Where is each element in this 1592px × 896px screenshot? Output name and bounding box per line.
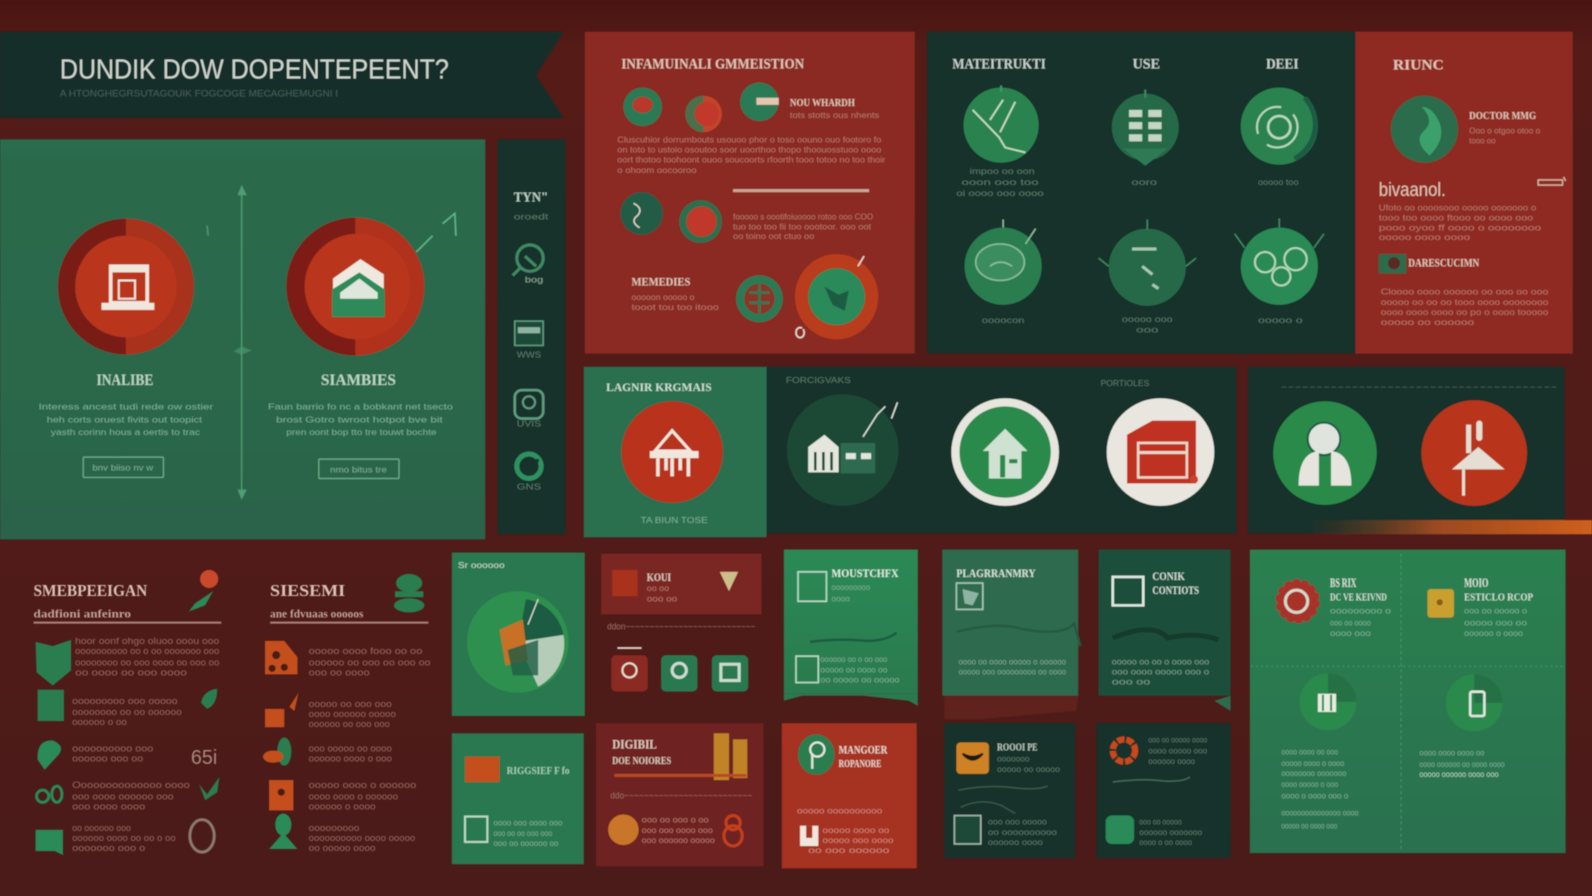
panel: pie chart: Sr oooooo (458, 560, 505, 570)
text row 2: tuo too too fii too oootoor. ooo oot (733, 222, 872, 232)
subheading: bivaanol. (1379, 180, 1446, 201)
icon: shield (36, 640, 71, 686)
text: ooooo ooo oooo (822, 835, 894, 845)
text: right description (268, 401, 453, 437)
text: ooo oo ooo o oo (642, 815, 709, 825)
icon: bookmark (38, 690, 64, 721)
text: remedies (632, 277, 719, 312)
text block: Ooo o otgoo otoo o (1469, 125, 1540, 135)
text (808, 825, 894, 855)
heading: right option: SIAMBIES (321, 371, 396, 389)
text left: ooooo oooo o oooo (1281, 758, 1344, 768)
text row: ooo oooo oooooo ooo (72, 791, 174, 801)
text row (72, 744, 153, 764)
subheading: DARESCUCIMN (1408, 257, 1479, 269)
text: oooo ooooo ooo (1148, 746, 1207, 756)
text row: oooooo oo ooo oo ooo oo (309, 657, 430, 667)
text row: oo ooooo oooo (309, 843, 376, 853)
icon: remedy large (795, 254, 878, 339)
icon: orange card (269, 780, 293, 810)
panel: dark icon strip right (1248, 367, 1565, 533)
text: ooooo oo oo o oooo ooo (1112, 656, 1209, 666)
icon: sidebar camera (515, 390, 543, 429)
text left: oooo o oooo ooo o (1281, 790, 1349, 800)
captions row 2: ooo (1136, 324, 1159, 334)
text: ooooo ooo oo (1464, 618, 1527, 628)
icon: leaves (263, 737, 291, 766)
text: ooo ooo ooooo (988, 817, 1047, 827)
text: ooooo oooooooooo (797, 806, 883, 816)
paragraph: Ufoto oo oooosooo ooooo ooooooo o (1379, 202, 1536, 212)
text left: oooo ooooo o ooo (1281, 779, 1338, 789)
icon: swirl (38, 740, 61, 770)
icon: orange tile (465, 757, 500, 782)
text: oooo ooo oooo ooo (493, 818, 563, 828)
text: ooo oo oooooo oo (493, 838, 559, 848)
icon: sprout (269, 814, 297, 849)
captions row 1 (956, 166, 1299, 198)
icon: knot (190, 820, 214, 852)
icon: orange tile (265, 641, 297, 674)
captions row 2: ooooo ooo (1122, 314, 1173, 324)
text block: tooo oo (1469, 135, 1496, 145)
paragraph: tooo too oooo ftooo oo oooo ooo (1379, 213, 1533, 223)
text (1139, 817, 1202, 847)
text: ooooooooo o (1330, 605, 1391, 615)
captions row 1: oi oooo ooo oooo (956, 188, 1044, 198)
text row 2: fooooo s oootifoiuoooo rotoo ooo COO (733, 212, 873, 222)
icon: window (954, 816, 981, 844)
icon: green circle bars (1300, 673, 1356, 730)
text: left description (39, 401, 213, 437)
text row: ooooo oo ooo ooo (309, 699, 392, 709)
sidebar heading: TYN" (514, 189, 548, 204)
panel: pie chart (452, 553, 585, 716)
text: DC VE KEIVND (1330, 592, 1387, 603)
card: bright green (784, 550, 918, 706)
squiggle (1113, 777, 1190, 782)
icon: book (36, 830, 63, 855)
panel: red right (1355, 32, 1573, 354)
panel: red brown card (596, 723, 764, 866)
icon: green seal (1391, 96, 1458, 163)
icon: amber tile (956, 742, 989, 774)
text row: ooooooooo ooo ooooo (72, 696, 178, 706)
icon: red house circle (621, 401, 723, 503)
panel: comparison (0, 139, 485, 539)
text row (309, 780, 416, 811)
column headings (952, 55, 1299, 72)
paragraph: ooooo oo oo oo tooo oooo oooooooo (1381, 297, 1549, 307)
text: ooooo oo oooo oo (820, 664, 888, 674)
panel: red brown card: ddo~~~~~~~~~~~~~~~~~~~~~~~~~~ (610, 790, 752, 800)
text row: oooooooooo ooo (72, 744, 153, 754)
icon: orange knot (724, 816, 742, 846)
button: left (83, 457, 163, 477)
icon: remedy small (736, 275, 783, 322)
text row (309, 699, 396, 729)
heading: left option: INALIBE (96, 371, 153, 389)
text block (1469, 111, 1540, 145)
card: dark orange (1097, 723, 1231, 858)
panel: jars (601, 554, 761, 692)
icon: sidebar camera: UVIS (517, 419, 541, 429)
icon: leaf (201, 689, 217, 709)
text: ooo oo ooooo oooo (1148, 734, 1207, 744)
icon: bars (714, 733, 747, 780)
icon: note (796, 656, 818, 683)
wave (1113, 630, 1218, 640)
text: ooo ooo oooo ooo (642, 825, 713, 835)
icon: green p circle (798, 734, 835, 775)
icon: runner (189, 570, 218, 611)
text left: ooooo oo oooo ooo (1281, 821, 1337, 831)
text: ooo oooo ooooo ooo o (1112, 666, 1209, 676)
icon: circle lower right (1235, 219, 1324, 305)
column headings: USE (1133, 55, 1160, 72)
text block: DOCTOR MMG (1469, 111, 1536, 122)
card: mid green (942, 550, 1080, 719)
heading: SIESEMI (270, 581, 346, 600)
icon: window (798, 572, 826, 601)
text (1464, 576, 1533, 638)
text: right description: pren oont bop tto tre touwt bochte (286, 427, 437, 437)
squiggle: ddon~~~~~~~~~~~~~~~~~~~~~~~~~~~ (607, 622, 755, 632)
icon: badge (1379, 254, 1406, 273)
icon: orange flower (1113, 739, 1135, 762)
icon: dark buildings circle (787, 394, 899, 506)
card: red: ROPANORE (839, 759, 881, 770)
icon: cup (800, 826, 818, 846)
icon: gear (1277, 581, 1318, 622)
panel: red brown card: DOE NOIORES (612, 756, 671, 767)
text: ooooo ooo ooooooooo oo oooo (958, 666, 1066, 676)
icon: sidebar card (515, 321, 543, 360)
paragraph (617, 134, 885, 175)
icon: small tag (1538, 177, 1566, 185)
text row: ooo oo oooo (309, 667, 370, 677)
heading: RIUNC (1393, 56, 1444, 73)
panel: dark grid (927, 32, 1355, 354)
captions row 2 (982, 314, 1303, 334)
text row (72, 823, 176, 853)
text: oo ooooo oo ooooo (820, 675, 900, 685)
icon: outlined box (465, 817, 487, 842)
icon: person circle (1273, 401, 1377, 505)
text: ooo oo oooo (1330, 618, 1371, 628)
text row 2 (733, 212, 873, 241)
button: left: bnv biiso nv w (92, 462, 154, 472)
text row: oo oooo oo ooo oooo (75, 667, 187, 677)
paragraph: o ohoom oocooroo (617, 165, 697, 175)
text row: ooo ooooo oo oooo (309, 744, 392, 754)
text row (309, 744, 392, 764)
subtitle: A HTONGHEGRSUTAGOUIK FOGCOGE MECAGHEMUGNI I (60, 89, 338, 99)
paragraph (1379, 202, 1542, 242)
text (1330, 576, 1391, 638)
text: remedies: MEMEDIES (632, 277, 690, 289)
paragraph: oort thotoo toohoont ouoo soucoorts rfoorth tooo totoo no too thoir (617, 155, 885, 165)
card: bright green: oooo (832, 593, 850, 603)
text (1112, 656, 1209, 687)
card: deep green: CONTIOTS (1152, 585, 1199, 597)
text: ooo oo oo ooo ooo (493, 828, 552, 838)
icon: stack circle (1112, 90, 1179, 166)
icon: window (956, 583, 983, 609)
text left: ooooooooooooooo oooo (1281, 808, 1359, 818)
divider arrow (234, 185, 252, 500)
heading: DIGIBIL (612, 738, 657, 752)
card: dark amber: ooooo oo ooooo (997, 764, 1060, 774)
panel: large green summary (1250, 550, 1566, 853)
paragraph: pooo oyoo ff oooo o oooooooo (1379, 223, 1542, 233)
text: MOIO (1464, 576, 1488, 590)
text: right description: brost Gotro twroot hotpot bve bit (276, 415, 443, 425)
text: left description: heh corts oruest fivits out toopict (47, 415, 203, 425)
panel: sidebar: oroedt (514, 212, 549, 222)
icon: sidebar card: WWS (517, 350, 541, 360)
title: DUNDIK DOW DOPENTEPEENT? (60, 53, 449, 84)
text row: ooooo oooo o oooooo (309, 780, 416, 790)
text: oooooo o oooo (1464, 628, 1523, 638)
squiggle (958, 786, 1048, 814)
icon: check (199, 777, 219, 800)
card: dark amber: ooooooo (997, 754, 1030, 764)
button: right (319, 459, 399, 478)
icon: right circle with house (286, 218, 424, 356)
paragraph (1381, 287, 1549, 327)
text row (75, 636, 219, 677)
icon: circle lower left (965, 220, 1042, 305)
icon: folder (1113, 577, 1143, 605)
text (820, 654, 900, 685)
icon: target circle (1241, 88, 1318, 165)
icon: network circle (964, 86, 1039, 163)
text row: oooooo oooo oo oo o oo (72, 833, 176, 843)
text row 2: oo toino oot ctuo oo (733, 231, 814, 241)
heading: ROOOI PE (997, 743, 1038, 754)
text: oooooo oooo (1148, 756, 1195, 766)
text row: oooooooo oo oo oooooo (72, 707, 182, 717)
paragraph: ooooo oo oooooo (1381, 317, 1475, 327)
heading: MOUSTCHFX (832, 568, 899, 580)
text right: oooo oooooo oo oooo oooo (1419, 759, 1505, 769)
icon: sidebar loop: GNS (517, 482, 541, 492)
text (958, 656, 1066, 676)
text: ooo oooooo ooooo (642, 835, 715, 845)
text left: oooooooo ooooooo (1281, 768, 1346, 778)
icon: white ring green house (951, 398, 1059, 506)
text row: oooooo o oo (72, 717, 127, 727)
panel: checklist right (263, 574, 430, 853)
icon: white ring red box (1107, 398, 1214, 506)
text: ooo oo ooooo (1139, 817, 1182, 827)
column headings: DEEI (1266, 55, 1299, 72)
text row: oooooooooo oo o oo ooooooo ooo (75, 646, 219, 656)
text: ooooo oooo oo (822, 825, 890, 835)
text row: ooooooooo (309, 823, 359, 833)
icon: rings (37, 786, 62, 802)
text row (309, 646, 430, 677)
text (1148, 734, 1207, 766)
button: right: nmo bitus tre (330, 464, 387, 474)
heading: SMEBPEEIGAN (34, 581, 148, 600)
labels: FORCIGVAKS (786, 375, 851, 385)
captions row 2: oooocon (982, 315, 1025, 325)
heading: CONIK (1152, 571, 1185, 583)
captions row 1: ooon ooo too (961, 177, 1039, 187)
text row: Oooooooooooooo oooo (72, 780, 190, 790)
panel: red causes (585, 32, 915, 354)
text row: oooooo o oooo (309, 801, 376, 811)
text: oooooo oooo (988, 837, 1043, 847)
icon: scribble: 65i (191, 747, 217, 769)
icon: figure circle (1421, 400, 1527, 506)
icon: jars (611, 647, 748, 692)
heading: MANGOER (839, 745, 888, 757)
icon row 2 (620, 192, 722, 243)
text row: oooooo ooo oo (72, 754, 143, 764)
panel: jars: ooo oo (647, 593, 677, 603)
chart: pie (467, 591, 569, 693)
text: oooo o oo oooo (1139, 837, 1192, 847)
paragraph: Cloooo oooo oooooo oo ooo oo ooo (1381, 287, 1549, 297)
icon: sidebar loop (517, 454, 541, 492)
text row 1: tots stotts ous nhents (790, 110, 879, 120)
text row 1: NOU WHARDH (790, 98, 855, 109)
panel: sidebar (498, 139, 566, 534)
text: left description: yasth corinn hous a oertis to trac (51, 427, 201, 437)
wave (956, 624, 1080, 646)
text row (72, 780, 190, 811)
icon: sidebar search: bog (525, 275, 543, 285)
text: oo ooo oooooo (808, 845, 890, 855)
text row: oooooooo oo ooo oooo oo ooo oo (75, 657, 219, 667)
text left: oooo oooo oo ooo (1281, 747, 1338, 757)
icon: mushroom (394, 574, 424, 612)
paragraph: ooooo oooo oooo (1379, 232, 1470, 242)
captions row 1: ooro (1132, 177, 1157, 187)
text left (1281, 747, 1359, 831)
icon: amber lock (1428, 589, 1454, 618)
icon: triangle (720, 572, 738, 591)
text: ooo oo ooooo o (1464, 605, 1527, 615)
panel: small green card: RIGGSIEF F fo (507, 766, 570, 777)
icon inner (806, 826, 812, 838)
icon: circle lower middle (1099, 220, 1196, 306)
text right: ooooo oooooo oooo ooo (1419, 769, 1499, 779)
paragraph: oooo oooo oooo oo po o oooo tooooo (1381, 307, 1549, 317)
text row: oooo oooo o oooooo (309, 791, 398, 801)
card: dark amber (944, 723, 1075, 858)
text: oooo ooo (1330, 628, 1371, 638)
text (493, 818, 563, 848)
card: deep green (1099, 550, 1231, 711)
wave (810, 633, 897, 642)
subheading: dadfioni anfeinro (34, 609, 131, 621)
caption: TA BIUN TOSE (641, 515, 708, 525)
text row (309, 823, 415, 853)
icon: green tile (1106, 816, 1134, 844)
text row (72, 696, 182, 727)
text: oooooo ooooooo (1139, 827, 1202, 837)
heading: PLAGRRANMRY (956, 568, 1036, 580)
column headings: MATEITRUKTI (952, 56, 1046, 72)
text right: oooo oooo oooo oo (1419, 748, 1485, 758)
text: left description: Interess ancest tudi rede ow ostier (39, 401, 213, 411)
text: oo oooooooooo (988, 827, 1057, 837)
text right (1419, 748, 1505, 779)
card: bright green: ooooooooo (832, 582, 870, 592)
text: remedies: ooooon ooooo o (632, 292, 695, 302)
panel: green tile (584, 367, 767, 537)
text (642, 815, 715, 845)
captions row 1: impoo oo oon (970, 166, 1035, 176)
text: ooo oo (1112, 677, 1151, 687)
text: BS RIX (1330, 576, 1357, 590)
text: remedies: tooot tou too itooo (632, 302, 719, 312)
text row: oooo oooooo ooooo (309, 709, 396, 719)
icon: green circle device (1446, 674, 1503, 731)
accent: orange strip (1310, 520, 1592, 534)
icon: thumbnail (612, 570, 638, 596)
card: red (782, 723, 917, 868)
panel: checklist left (34, 570, 221, 855)
text: KOUI (647, 572, 671, 584)
captions row 1: ooooo too (1258, 177, 1299, 187)
icon: sidebar search (513, 245, 543, 285)
divider line (733, 189, 869, 192)
panel: jars: oo oo (647, 583, 669, 593)
text (988, 817, 1057, 847)
heading: INFAMUINALI GMMEISTION (621, 55, 804, 72)
icon: left circle (58, 219, 194, 355)
text: right description: Faun barrio fo nc a bobkant net tsecto (268, 401, 453, 411)
accent arrow (207, 213, 456, 252)
labels (786, 375, 1150, 388)
panel: small green card (452, 733, 584, 864)
text row: oooooooooo oooo ooooo (309, 833, 415, 843)
title banner (0, 32, 563, 118)
panel: dark icon strip (767, 367, 1237, 533)
paragraph: on toto to ustoio osoutoo soor uoorthoo thopo thoouosstuoo oooo (617, 145, 881, 155)
text row: oo oooooo ooo (72, 823, 131, 833)
icon row 1 (623, 82, 779, 132)
text row: hoor oonf ohgo oluoo ooou ooo (75, 636, 219, 646)
subheading: ane fdvuaas ooooos (270, 609, 364, 621)
heading: LAGNIR KRGMAIS (606, 382, 712, 394)
icon: orange circle (608, 815, 639, 845)
labels: PORTIOLES (1101, 378, 1150, 388)
text row 1 (790, 98, 879, 120)
text: oooooo oo o oo ooo (820, 654, 888, 664)
text: oooo oo oooo ooooo o oooooo (958, 656, 1066, 666)
text row: oooooo oooo o ooo (309, 754, 392, 764)
icon: tool (265, 693, 298, 727)
text row: oooooo oo ooo ooo (309, 719, 390, 729)
text row: ooooooo ooo o (72, 843, 145, 853)
text row: ooo oooo oooo (72, 801, 145, 811)
text row: ooooo oooo fooo oo oo (309, 646, 422, 656)
captions row 2: ooooo o (1258, 315, 1303, 325)
paragraph: Cluscuhior dorrumbouts usouoo phor o toso oouno ouo footoro fo (617, 134, 881, 144)
text: ESTICLO RCOP (1464, 592, 1533, 603)
